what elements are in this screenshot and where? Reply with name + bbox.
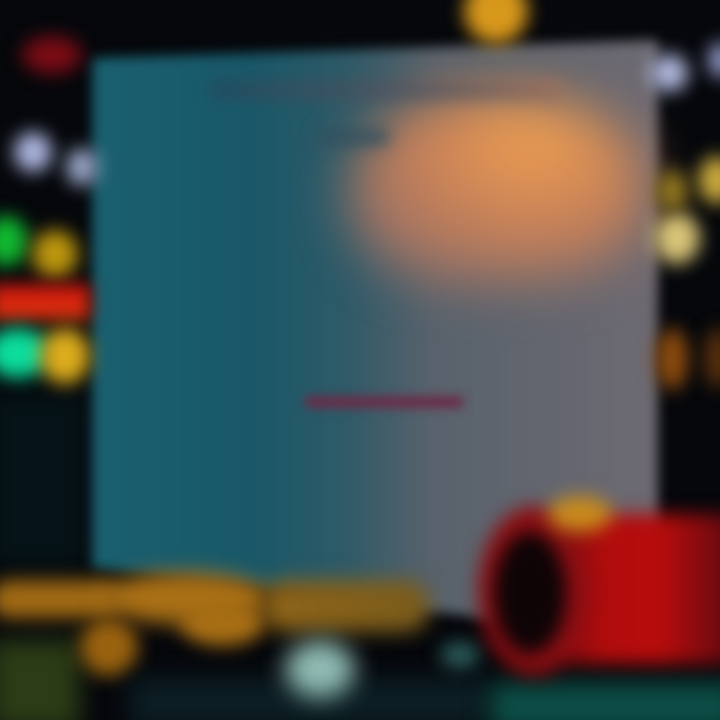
icon: right orange light [656, 328, 688, 390]
scroll highlight [548, 496, 612, 532]
illustration: gold coin lower [80, 618, 138, 676]
icon: top right edge light [708, 42, 720, 78]
illustration: pale mint object [285, 640, 355, 698]
illustration: teal floor right [490, 682, 720, 720]
icon: right cream light three [698, 156, 720, 204]
scroll body [546, 514, 720, 664]
icon: top left red light [22, 36, 82, 74]
panel: dark left lower backdrop [0, 395, 85, 565]
illustration: small mint object [440, 642, 480, 668]
icon: top right white light [650, 54, 688, 92]
illustration: gold coin cluster [100, 572, 270, 624]
icon: top yellow light [464, 0, 528, 44]
illustration: dark teal base [130, 678, 490, 720]
scroll end [478, 506, 590, 676]
icon: yellow light [32, 230, 78, 278]
illustration: gold coins band [0, 580, 120, 618]
text block: red caption [305, 396, 463, 408]
illustration: dark green base left [0, 640, 80, 720]
illustration: gold coin right [262, 580, 430, 632]
text block: blurred subtitle [318, 130, 388, 144]
icon: left white light one [14, 132, 52, 172]
icon: amber light [40, 328, 90, 384]
icon: right edge orange light [704, 328, 720, 388]
icon: red band [0, 284, 90, 320]
scroll hole [494, 532, 566, 654]
illustration: red scroll [466, 485, 720, 688]
panel: teal and grey poster [84, 32, 666, 624]
icon: right cream light one [654, 212, 700, 264]
icon: left white light two [66, 148, 98, 186]
panel: orange glow [350, 92, 646, 282]
icon: green light [0, 216, 28, 266]
illustration: gold coin middle [180, 600, 265, 646]
heading: blurred title [212, 82, 562, 98]
icon: right amber light two [656, 170, 688, 212]
icon: aqua light [0, 328, 50, 378]
